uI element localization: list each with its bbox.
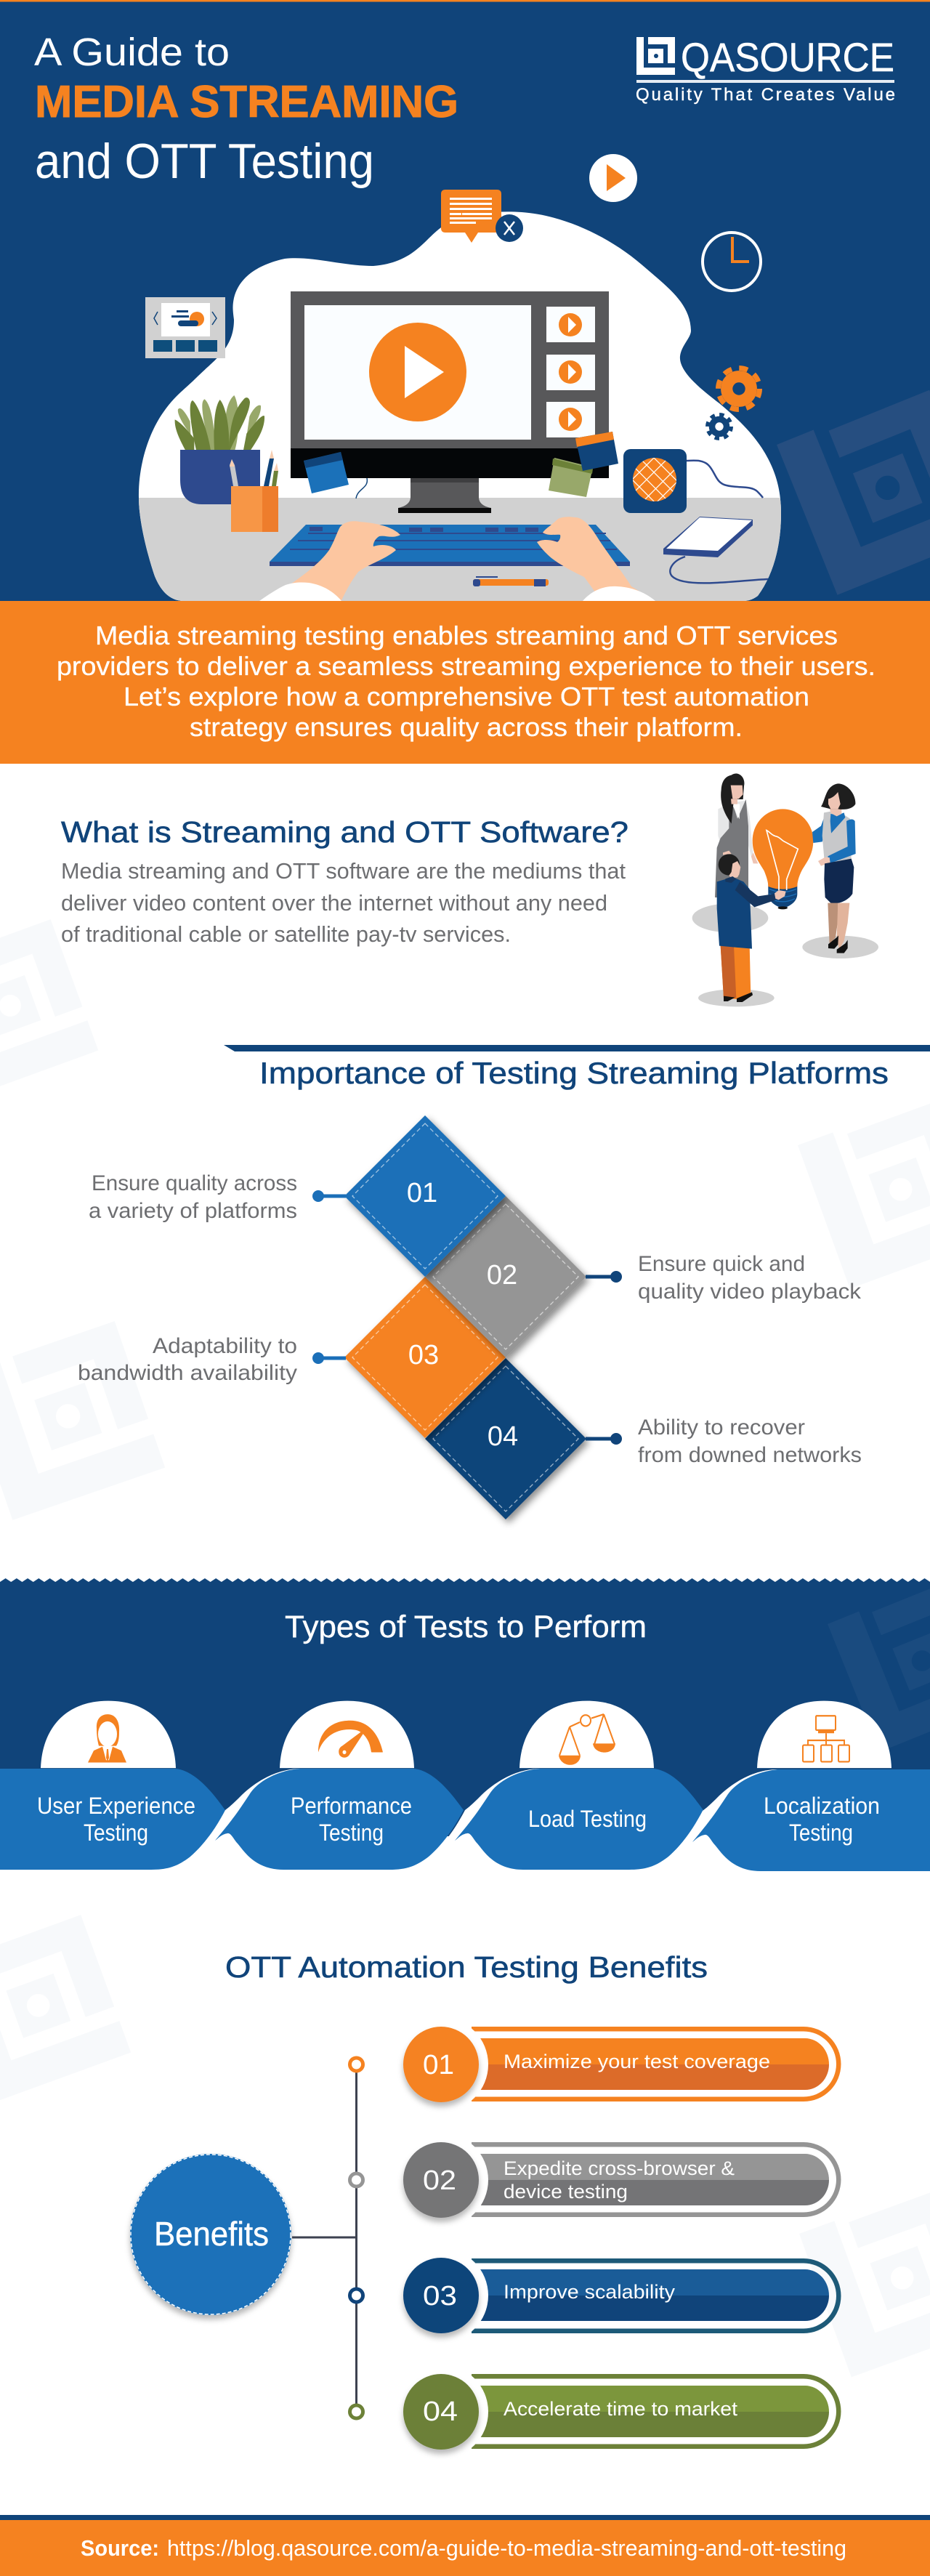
tab: localization testing: Localization (764, 1793, 880, 1819)
label: 04: Ability to recover (638, 1416, 805, 1440)
benefit 04: 04 (423, 2397, 458, 2427)
intro text: strategy ensures quality across their platform. (190, 712, 743, 742)
label: 01 (89, 1171, 297, 1223)
label: 02 (638, 1252, 862, 1304)
panel: hero (0, 0, 930, 601)
icon: gears (708, 368, 760, 439)
illustration: speaker and cable (623, 449, 763, 513)
connector: 04 (586, 1433, 622, 1445)
body text: of traditional cable or satellite pay-tv services. (61, 921, 511, 947)
tab: user experience testing: Testing (84, 1820, 148, 1846)
title: and OTT Testing (35, 134, 374, 189)
icon: network in a dome (757, 1701, 891, 1768)
label: 04: from downed networks (638, 1443, 862, 1467)
heading: Importance of Testing Streaming Platforms (259, 1056, 889, 1090)
connector: 03 (312, 1352, 346, 1364)
icon: chat bubble (441, 190, 523, 243)
footer: source: https://blog.qasource.com/a-guide-to-media-streaming-and-ott-testing (167, 2535, 846, 2561)
image slider widget (145, 297, 225, 358)
tab: performance testing: Testing (319, 1820, 384, 1846)
heading: Types of Tests to Perform (285, 1610, 647, 1644)
illustration: white blob and desk (139, 211, 781, 601)
benefit 04 (394, 2365, 841, 2459)
heading: What is Streaming and OTT Software? (61, 815, 628, 849)
panel: intro band (0, 601, 930, 764)
tab: localization testing: Testing (789, 1820, 853, 1846)
title (34, 31, 458, 189)
benefit 02 (394, 2133, 841, 2227)
benefits hub circle: Benefits (154, 2215, 269, 2253)
connector: 01 (312, 1190, 346, 1202)
title: A Guide to (34, 31, 230, 74)
label: 02: quality video playback (638, 1280, 862, 1304)
tab: load testing (430, 1769, 703, 1870)
panel: types of tests (0, 1572, 930, 1871)
connector: 02 (586, 1271, 622, 1283)
panel: importance of testing (78, 1045, 930, 1519)
illustration: potted plant and pencils (175, 395, 278, 532)
icon: gauge in a dome (280, 1701, 414, 1768)
icon: floating play button (589, 154, 637, 202)
tab: user experience testing (0, 1769, 225, 1870)
label: 01: a variety of platforms (89, 1199, 297, 1223)
diamond 02 (425, 1196, 586, 1357)
tab: user experience testing: User Experience (37, 1793, 195, 1819)
label: 04 (638, 1416, 862, 1467)
logo: QASource (636, 34, 895, 105)
label: 03: bandwidth availability (78, 1361, 297, 1385)
footer: source: Source: (81, 2535, 159, 2561)
intro text: Let’s explore how a comprehensive OTT test automation (124, 682, 809, 711)
logo: QASource: QASOURCE (681, 34, 894, 80)
benefit 03: 03 (423, 2281, 457, 2311)
diamond 04 (425, 1358, 586, 1519)
body text: Media streaming and OTT software are the mediums that (61, 858, 626, 884)
icon: user in a dome (41, 1701, 176, 1768)
benefit 02: 02 (423, 2165, 456, 2196)
panel: what is streaming (61, 774, 878, 1006)
label: 02: Ensure quick and (638, 1252, 805, 1276)
diamond 01: 01 (407, 1178, 437, 1208)
benefit 03 (394, 2248, 841, 2343)
benefit 04: Accelerate time to market (504, 2398, 738, 2420)
diamond 03 (344, 1277, 506, 1438)
body text (61, 858, 626, 947)
illustration: hands (259, 517, 655, 601)
panel: automation benefits (130, 1950, 841, 2459)
label: 03 (78, 1334, 297, 1385)
main video screen (304, 305, 531, 440)
label: 01: Ensure quality across (92, 1171, 297, 1195)
tab: load testing: Load Testing (528, 1806, 647, 1832)
diamond 01 (344, 1115, 506, 1277)
benefit 01: 01 (423, 2050, 454, 2080)
timeline connector (292, 2058, 363, 2418)
intro text: providers to deliver a seamless streaming experience to their users. (57, 651, 876, 681)
illustration: pen on desk (473, 576, 549, 586)
body text: deliver video content over the internet without any need (61, 890, 607, 916)
sticky notes (304, 432, 618, 497)
tab: performance testing: Performance (291, 1793, 412, 1819)
benefit 02: Expedite cross-browser & (504, 2157, 735, 2179)
tab: performance testing (190, 1769, 464, 1870)
tab: localization testing (668, 1769, 930, 1871)
intro text (57, 621, 876, 742)
heading: OTT Automation Testing Benefits (225, 1950, 708, 1984)
logo: QASource: Quality That Creates Value (636, 85, 895, 105)
diamond 04: 04 (488, 1421, 518, 1452)
illustration: people with light bulb (692, 774, 878, 1006)
icon: clock (703, 233, 761, 291)
illustration: monitor (291, 291, 609, 513)
diamond 02: 02 (487, 1260, 517, 1291)
title: MEDIA STREAMING (35, 77, 458, 127)
benefit 02: device testing (504, 2181, 628, 2202)
footer: source (0, 2515, 930, 2576)
label: 03: Adaptability to (153, 1334, 297, 1358)
benefits hub circle (130, 2154, 291, 2315)
illustration: keyboard (270, 525, 630, 566)
icon: scales in a dome (519, 1701, 654, 1768)
intro text: Media streaming testing enables streaming and OTT services (95, 621, 838, 650)
benefit 01 (394, 2017, 841, 2112)
video thumbnails (546, 307, 595, 437)
illustration: smartphone (663, 517, 768, 583)
diamond 03: 03 (408, 1340, 439, 1370)
pale watermarks on white sections (0, 914, 930, 2377)
benefit 03: Improve scalability (504, 2281, 676, 2303)
benefit 01: Maximize your test coverage (504, 2051, 770, 2072)
